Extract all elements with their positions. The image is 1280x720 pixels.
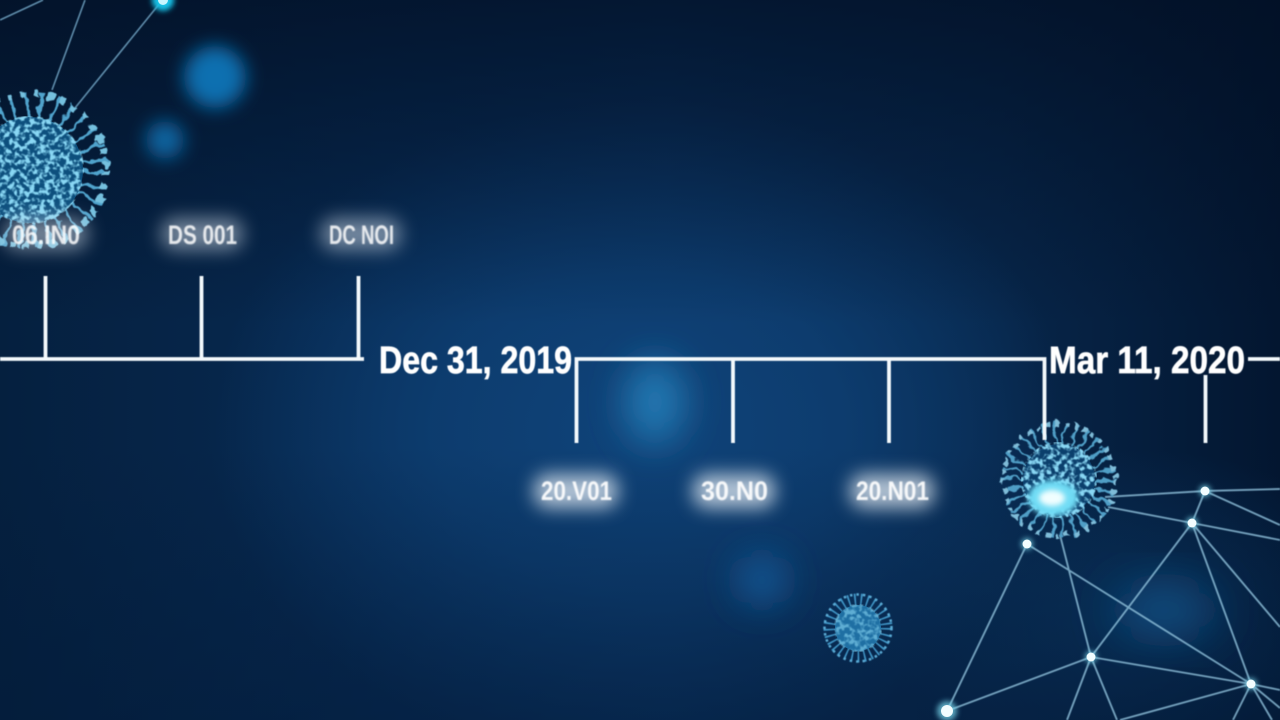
timeline: right segment with tick: [1206, 359, 1280, 443]
timeline: left segment with ticks: [0, 276, 364, 359]
network lines, bottom right: [947, 489, 1280, 720]
blurred tick label 1, lower: 20.V01: [541, 476, 612, 506]
network nodes, bottom right: [937, 485, 1257, 720]
network node, top left: [152, 0, 174, 11]
date label: Mar 11, 2020: Mar 11, 2020: [1049, 340, 1245, 382]
blurred tick label 3, lower: 20.N01: [856, 476, 929, 506]
blurred tick label 2, lower: 30.N0: [701, 476, 768, 506]
blurred tick label 3, upper: DC NOI: [329, 220, 394, 250]
blurred tick label 1, upper: 06.IN0: [12, 220, 80, 250]
timeline: middle segment with ticks: [576, 359, 1044, 443]
network lines, top left: [0, 0, 160, 108]
blurred tick label 3, upper: [321, 218, 401, 250]
date label: Dec 31, 2019: Dec 31, 2019: [379, 340, 572, 382]
icon: small virus, lower centre: [824, 594, 892, 662]
icon: large virus, left: [0, 94, 106, 246]
blurred light blobs: [146, 46, 1215, 632]
blurred tick label 2, upper: DS 001: [168, 220, 237, 250]
icon: medium virus, right: [1003, 424, 1115, 536]
